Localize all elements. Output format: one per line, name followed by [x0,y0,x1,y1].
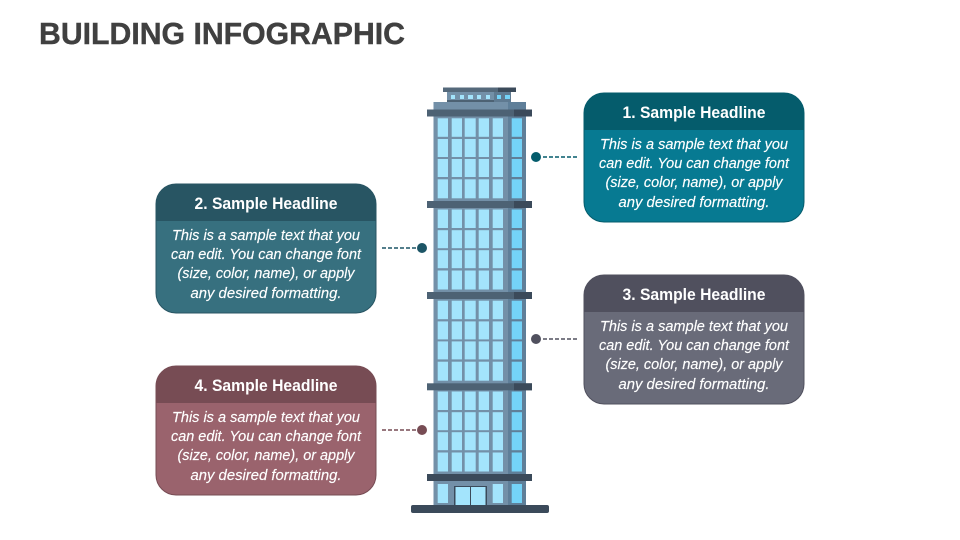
body text 3: any desired formatting. [618,377,770,393]
heading 3: 3. Sample Headline [622,286,766,304]
body text 4: (size, color, name), or apply [178,448,355,464]
body text 1: This is a sample text that you [600,137,788,153]
connector 4 [382,425,427,435]
body text 3 [599,319,790,393]
body text 2: (size, color, name), or apply [178,266,355,282]
connector 3 [531,334,577,344]
body text 4: can edit. You can change font [171,429,362,445]
body text 1 [599,137,790,211]
body text 3: This is a sample text that you [600,319,788,335]
building floor bands [427,110,532,481]
body text 4 [171,410,362,484]
building roof cap [443,88,516,92]
building [411,88,549,513]
building penthouse [447,92,511,102]
body text 1: can edit. You can change font [599,156,790,172]
body text 1: (size, color, name), or apply [606,175,783,191]
body text 2 [171,228,362,302]
connector 2 [382,243,427,253]
heading 4: 4. Sample Headline [194,377,338,395]
body text 2: can edit. You can change font [171,247,362,263]
body text 3: (size, color, name), or apply [606,357,783,373]
body text 2: any desired formatting. [190,286,342,302]
building tower body [433,102,526,505]
title: BUILDING INFOGRAPHIC [39,17,405,51]
building ground floor [438,484,522,505]
panel: headline 3 [584,275,804,404]
building base [411,505,549,513]
panel: headline 4 [156,366,376,495]
heading 2: 2. Sample Headline [194,195,338,213]
connector 1 [531,152,577,162]
heading 1: 1. Sample Headline [622,104,766,122]
body text 1: any desired formatting. [618,195,770,211]
body text 4: any desired formatting. [190,468,342,484]
body text 4: This is a sample text that you [172,410,360,426]
body text 2: This is a sample text that you [172,228,360,244]
building windows [438,118,522,472]
panel: headline 1 [584,93,804,222]
body text 3: can edit. You can change font [599,338,790,354]
panel: headline 2 [156,184,376,313]
